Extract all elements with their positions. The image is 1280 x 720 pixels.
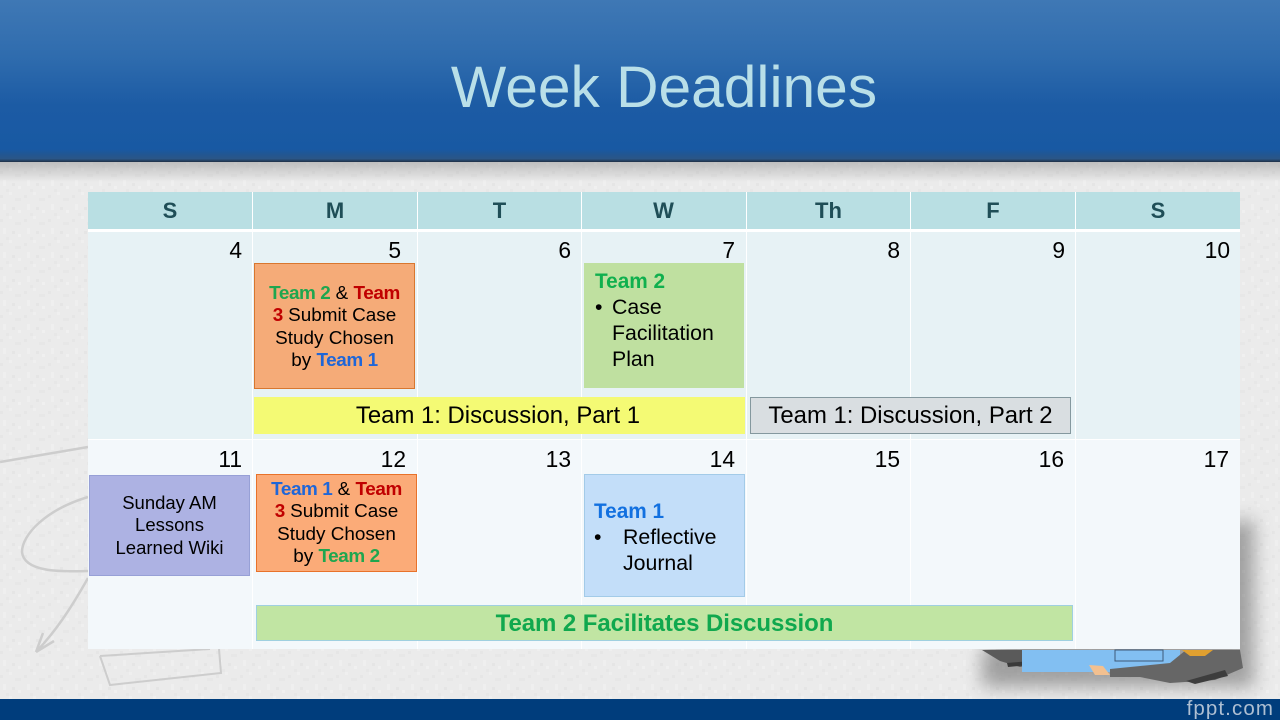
calendar weekday header: [88, 192, 1240, 229]
event: team 2 case facilitation plan: Plan: [612, 347, 655, 371]
calendar week one row: 10: [1205, 237, 1230, 263]
event: team 2 and 3 submit case study: by Team 1: [291, 350, 378, 371]
calendar week two row: 14: [710, 446, 735, 472]
footer brand: fppt.com: [1187, 697, 1274, 720]
calendar week one row: [88, 232, 1240, 439]
event: team 2 case facilitation plan: Team 2: [595, 270, 665, 293]
event: team 2 case facilitation plan: Facilitation: [612, 321, 714, 345]
calendar week two row: 12: [381, 446, 406, 472]
calendar week one row: 9: [1052, 237, 1065, 263]
calendar weekday header: S: [1151, 198, 1165, 223]
calendar: [88, 192, 1240, 649]
card drop shadow: [971, 510, 1265, 698]
header banner: [0, 0, 1280, 162]
calendar week two row: 15: [875, 446, 900, 472]
bar: team 1 discussion part 2: Team 1: Discussion, Part 2: [768, 402, 1053, 429]
event: team 1 and 3 submit case study: 3 Submit Case: [275, 501, 398, 522]
calendar week two row: 17: [1204, 446, 1229, 472]
event: team 1 reflective journal: •: [594, 525, 601, 549]
event: sunday lessons learned wiki: Sunday AM: [122, 492, 217, 513]
sketch lines behind the calendar: [0, 446, 222, 686]
calendar weekday header: T: [493, 198, 506, 223]
event: team 1 reflective journal: Reflective: [623, 525, 717, 549]
event: team 2 and 3 submit case study: Study Chosen: [275, 328, 394, 349]
illustration: figure holding blueprint: [982, 650, 1243, 684]
event: team 2 case facilitation plan: •: [595, 295, 602, 319]
event: team 2 case facilitation plan: [584, 263, 744, 388]
event: team 1 and 3 submit case study: Study Chosen: [277, 524, 396, 545]
calendar week one row: 8: [887, 237, 900, 263]
event: team 1 and 3 submit case study: by Team 2: [293, 546, 380, 567]
event: team 1 reflective journal: Team 1: [594, 500, 664, 523]
event: team 2 and 3 submit case study: 3 Submit Case: [273, 305, 396, 326]
bar: team 1 discussion part 1: Team 1: Discussion, Part 1: [356, 402, 640, 429]
calendar weekday header: S: [163, 198, 177, 223]
event: team 1 reflective journal: [584, 474, 745, 597]
bar: team 2 facilitates discussion: [256, 605, 1073, 641]
calendar weekday header: W: [653, 198, 674, 223]
event: team 2 and 3 submit case study: [254, 263, 415, 389]
calendar week two row: 11: [218, 446, 242, 472]
event: team 2 and 3 submit case study: Team 2 & Team: [269, 283, 400, 304]
calendar week two row: 16: [1039, 446, 1064, 472]
bar: team 1 discussion part 1: [254, 397, 745, 434]
calendar weekday header: M: [326, 198, 344, 223]
footer bar: [0, 699, 1280, 720]
calendar week two row: 13: [546, 446, 571, 472]
calendar week one row: 5: [388, 237, 401, 263]
calendar week one row: 7: [722, 237, 735, 263]
calendar weekday header: Th: [815, 198, 842, 223]
event: team 1 and 3 submit case study: Team 1 & Team: [271, 479, 402, 500]
event: sunday lessons learned wiki: [89, 475, 250, 576]
calendar weekday header: F: [986, 198, 1000, 223]
bar: team 2 facilitates discussion: Team 2 Facilitates Discussion: [496, 610, 833, 637]
calendar week one row: 6: [558, 237, 571, 263]
title: Week Deadlines: [451, 55, 877, 120]
event: sunday lessons learned wiki: Learned Wiki: [116, 537, 223, 558]
event: team 2 case facilitation plan: Case: [612, 295, 662, 319]
bar: team 1 discussion part 2: [750, 397, 1071, 434]
event: sunday lessons learned wiki: Lessons: [135, 514, 204, 535]
event: team 1 and 3 submit case study: [256, 474, 417, 572]
event: team 1 reflective journal: Journal: [623, 551, 693, 575]
calendar week one row: 4: [229, 237, 242, 263]
